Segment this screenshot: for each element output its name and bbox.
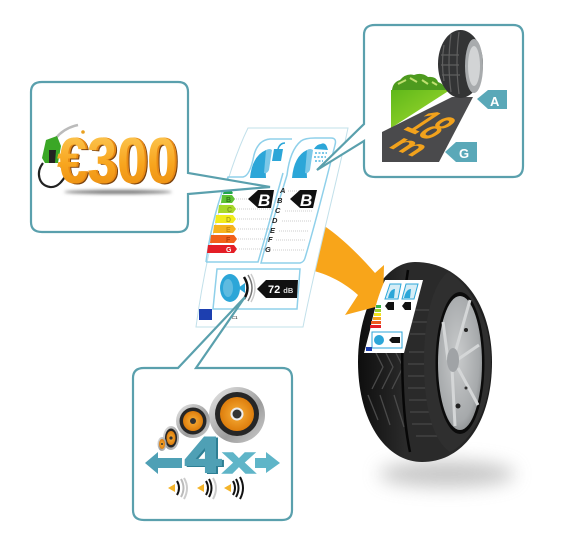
panel outline with pointer — [317, 25, 523, 177]
wet grip scale letters: D — [272, 216, 278, 225]
noise value badge: 72 dB — [268, 284, 294, 296]
panel: fuel savings — [31, 82, 270, 232]
grass block — [391, 74, 450, 128]
icon: wet tyre and rain cloud — [292, 150, 310, 178]
tyre ground shadow — [379, 461, 515, 487]
wet grip scale letters: A — [279, 186, 285, 195]
rating badge: B: B — [300, 191, 312, 210]
wet grip scale letters: E — [270, 226, 276, 235]
braking distance: 18 — [393, 103, 468, 147]
fuel saving amount: €300 — [59, 124, 179, 197]
mini label pictograms — [385, 284, 418, 299]
panel outline with pointer — [133, 297, 292, 520]
wet grip scale letters: F — [268, 235, 273, 244]
fuel saving amount: €300 — [60, 125, 180, 198]
small label on tyre — [364, 280, 423, 353]
grade tag A: A — [490, 94, 500, 109]
panel: energy label sheet — [196, 128, 348, 327]
wet grip scale letters: B — [277, 196, 283, 205]
icon: fuel pump nozzle — [39, 125, 85, 187]
icon: EU flag — [199, 309, 212, 320]
sheet outline — [196, 128, 348, 327]
panel: noise — [133, 297, 292, 520]
4x arrow: 4 — [185, 427, 221, 483]
grade tag G — [445, 142, 477, 162]
wet grip scale letters — [265, 186, 285, 254]
mini rating bars — [370, 305, 381, 328]
rating scale bars: G — [226, 247, 232, 254]
big orange arrow — [310, 222, 384, 315]
grade tag G: G — [459, 146, 469, 161]
noise class text: - C1 — [229, 315, 238, 320]
rating scale bars: E — [226, 227, 231, 234]
wheel rim — [436, 292, 484, 434]
wet grip scale letters: G — [265, 245, 271, 254]
icon: speakers — [158, 387, 265, 451]
rating scale bars: B — [226, 197, 231, 204]
4x arrow — [145, 427, 280, 484]
ground shadow — [64, 190, 172, 194]
panel: wet braking distance — [317, 25, 523, 177]
rating scale bars — [207, 190, 237, 254]
icon: tyre — [438, 30, 483, 98]
mini noise box — [372, 332, 402, 348]
tyre — [358, 262, 515, 487]
fuel saving amount: €300 — [57, 124, 177, 197]
icon: fuel tyre and pump — [250, 150, 269, 178]
4x arrow: x — [223, 440, 255, 482]
icon: volume levels — [168, 477, 243, 499]
wet grip scale letters: C — [275, 206, 281, 215]
panel: wet braking distance: m — [380, 131, 439, 162]
noise box — [213, 269, 300, 309]
4x arrow: 4 — [187, 428, 223, 484]
panel outline with pointer — [31, 82, 270, 232]
icon: tyre with sound waves — [220, 274, 255, 302]
road — [382, 97, 473, 162]
tyre tread — [358, 262, 492, 462]
wet grip column — [261, 138, 336, 263]
rating scale bars: C — [227, 207, 232, 214]
rating scale bars: D — [226, 217, 231, 224]
tyre sidewall — [424, 272, 491, 452]
rating scale bars: F — [226, 237, 231, 244]
grade tag A — [477, 90, 507, 109]
mini B badges — [385, 302, 411, 310]
fuel efficiency column — [206, 139, 292, 262]
rating badge: B: B — [258, 191, 270, 210]
